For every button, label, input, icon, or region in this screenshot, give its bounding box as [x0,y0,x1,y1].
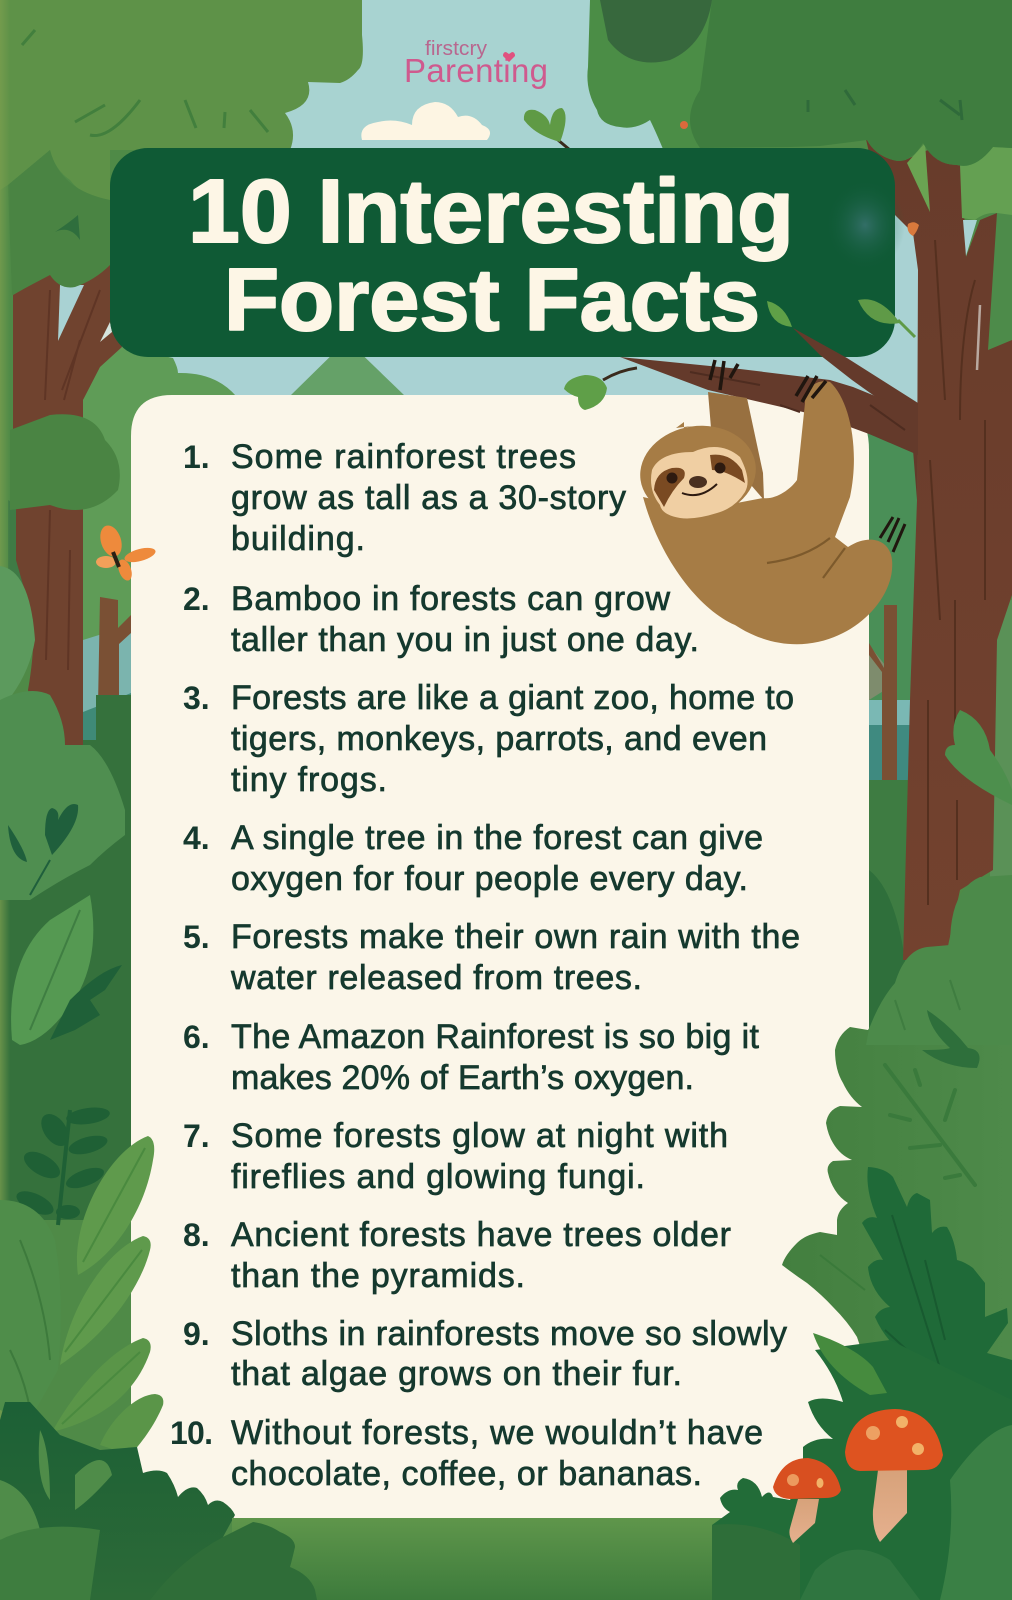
cream text panel [131,395,869,1518]
icon: sloth [634,360,905,644]
ground [232,1518,752,1600]
fact 9: that algae grows on their fur. [231,1355,682,1393]
icon: leaf on branch twig [564,368,637,410]
fact 9: 9. [183,1316,210,1352]
fact 10: 10. [170,1415,213,1451]
icon: butterfly [96,523,157,582]
fact 3: tigers, monkeys, parrots, and even [231,720,767,758]
fact 9 [183,1315,787,1393]
fern [13,1105,111,1225]
icon: leaf on title [767,301,792,327]
fact 9: Sloths in rainforests move so slowly [231,1315,787,1353]
lower dark leaf mass [712,1340,1012,1600]
fact list [170,438,800,1493]
fact 7: fireflies and glowing fungi. [231,1158,645,1196]
top right canopy [587,0,1012,166]
fact 8: 8. [183,1217,210,1253]
fact 7 [183,1117,728,1196]
right foliage [712,710,1012,1600]
fact 4: oxygen for four people every day. [231,860,748,898]
fact 8: Ancient forests have trees older [231,1216,731,1254]
right lighter canopy [960,135,1012,220]
oak leaf [862,1167,1012,1600]
logo: firstcry [425,38,487,60]
fact 8: than the pyramids. [231,1257,525,1295]
fact 4: 4. [183,820,210,856]
title: 10 Interesting [188,162,794,262]
fact 1: 1. [183,439,210,475]
fact 2: taller than you in just one day. [231,621,699,659]
fact 1: Some rainforest trees [231,438,576,476]
right background forest strip [862,130,1012,1060]
light leaf [813,1333,887,1395]
right branch [620,328,918,500]
fact 6: 6. [183,1019,210,1055]
dark bush corner [0,1402,235,1600]
fact 3: 3. [183,680,210,716]
fact 3 [183,679,794,799]
icon: heart leaf above title [524,108,570,150]
fact 2 [183,580,699,659]
distant mountain [290,340,405,396]
fact 10 [170,1414,763,1493]
left foliage [0,566,235,1600]
icon: mushrooms [773,1409,943,1543]
sky [60,0,920,410]
icon: leaf on title right [858,299,915,337]
left background bushes and small tree [0,347,236,1220]
fact 6: The Amazon Rainforest is so big it [231,1018,760,1056]
orange knob on trunk [908,222,919,236]
fact 10: chocolate, coffee, or bananas. [231,1455,702,1493]
left tree trunk [8,260,122,745]
fact 3: tiny frogs. [231,761,387,799]
fact 1: building. [231,520,365,558]
fact 2: Bamboo in forests can grow [231,580,670,618]
title: Forest Facts [224,250,760,349]
fact 1: grow as tall as a 30-story [231,479,626,517]
fact 6 [183,1018,760,1097]
orange canopy dot [680,121,688,129]
logo: Parenting [404,52,548,89]
title [188,162,794,349]
fact 5: water released from trees. [230,959,642,997]
fact 5: 5. [183,919,210,955]
fact 3: Forests are like a giant zoo, home to [231,679,794,717]
cloud [361,102,490,140]
fact 7: Some forests glow at night with [231,1117,728,1155]
fact 2: 2. [183,581,210,617]
fact 4: A single tree in the forest can give [231,819,763,857]
right tree trunk [865,135,1012,960]
fact 1 [183,438,626,558]
top left canopy [0,0,363,1600]
title panel [110,148,905,357]
bottom centre bush [150,1522,317,1600]
fact 5 [183,918,800,997]
fact 8 [183,1216,731,1295]
leaves [52,1136,163,1455]
fact 7: 7. [183,1118,210,1154]
left dark bush [10,414,120,510]
fact 5: Forests make their own rain with the [231,918,800,956]
fact 4 [183,819,763,898]
fact 6: makes 20% of Earth’s oxygen. [231,1059,694,1097]
fact 10: Without forests, we wouldn’t have [231,1414,763,1452]
